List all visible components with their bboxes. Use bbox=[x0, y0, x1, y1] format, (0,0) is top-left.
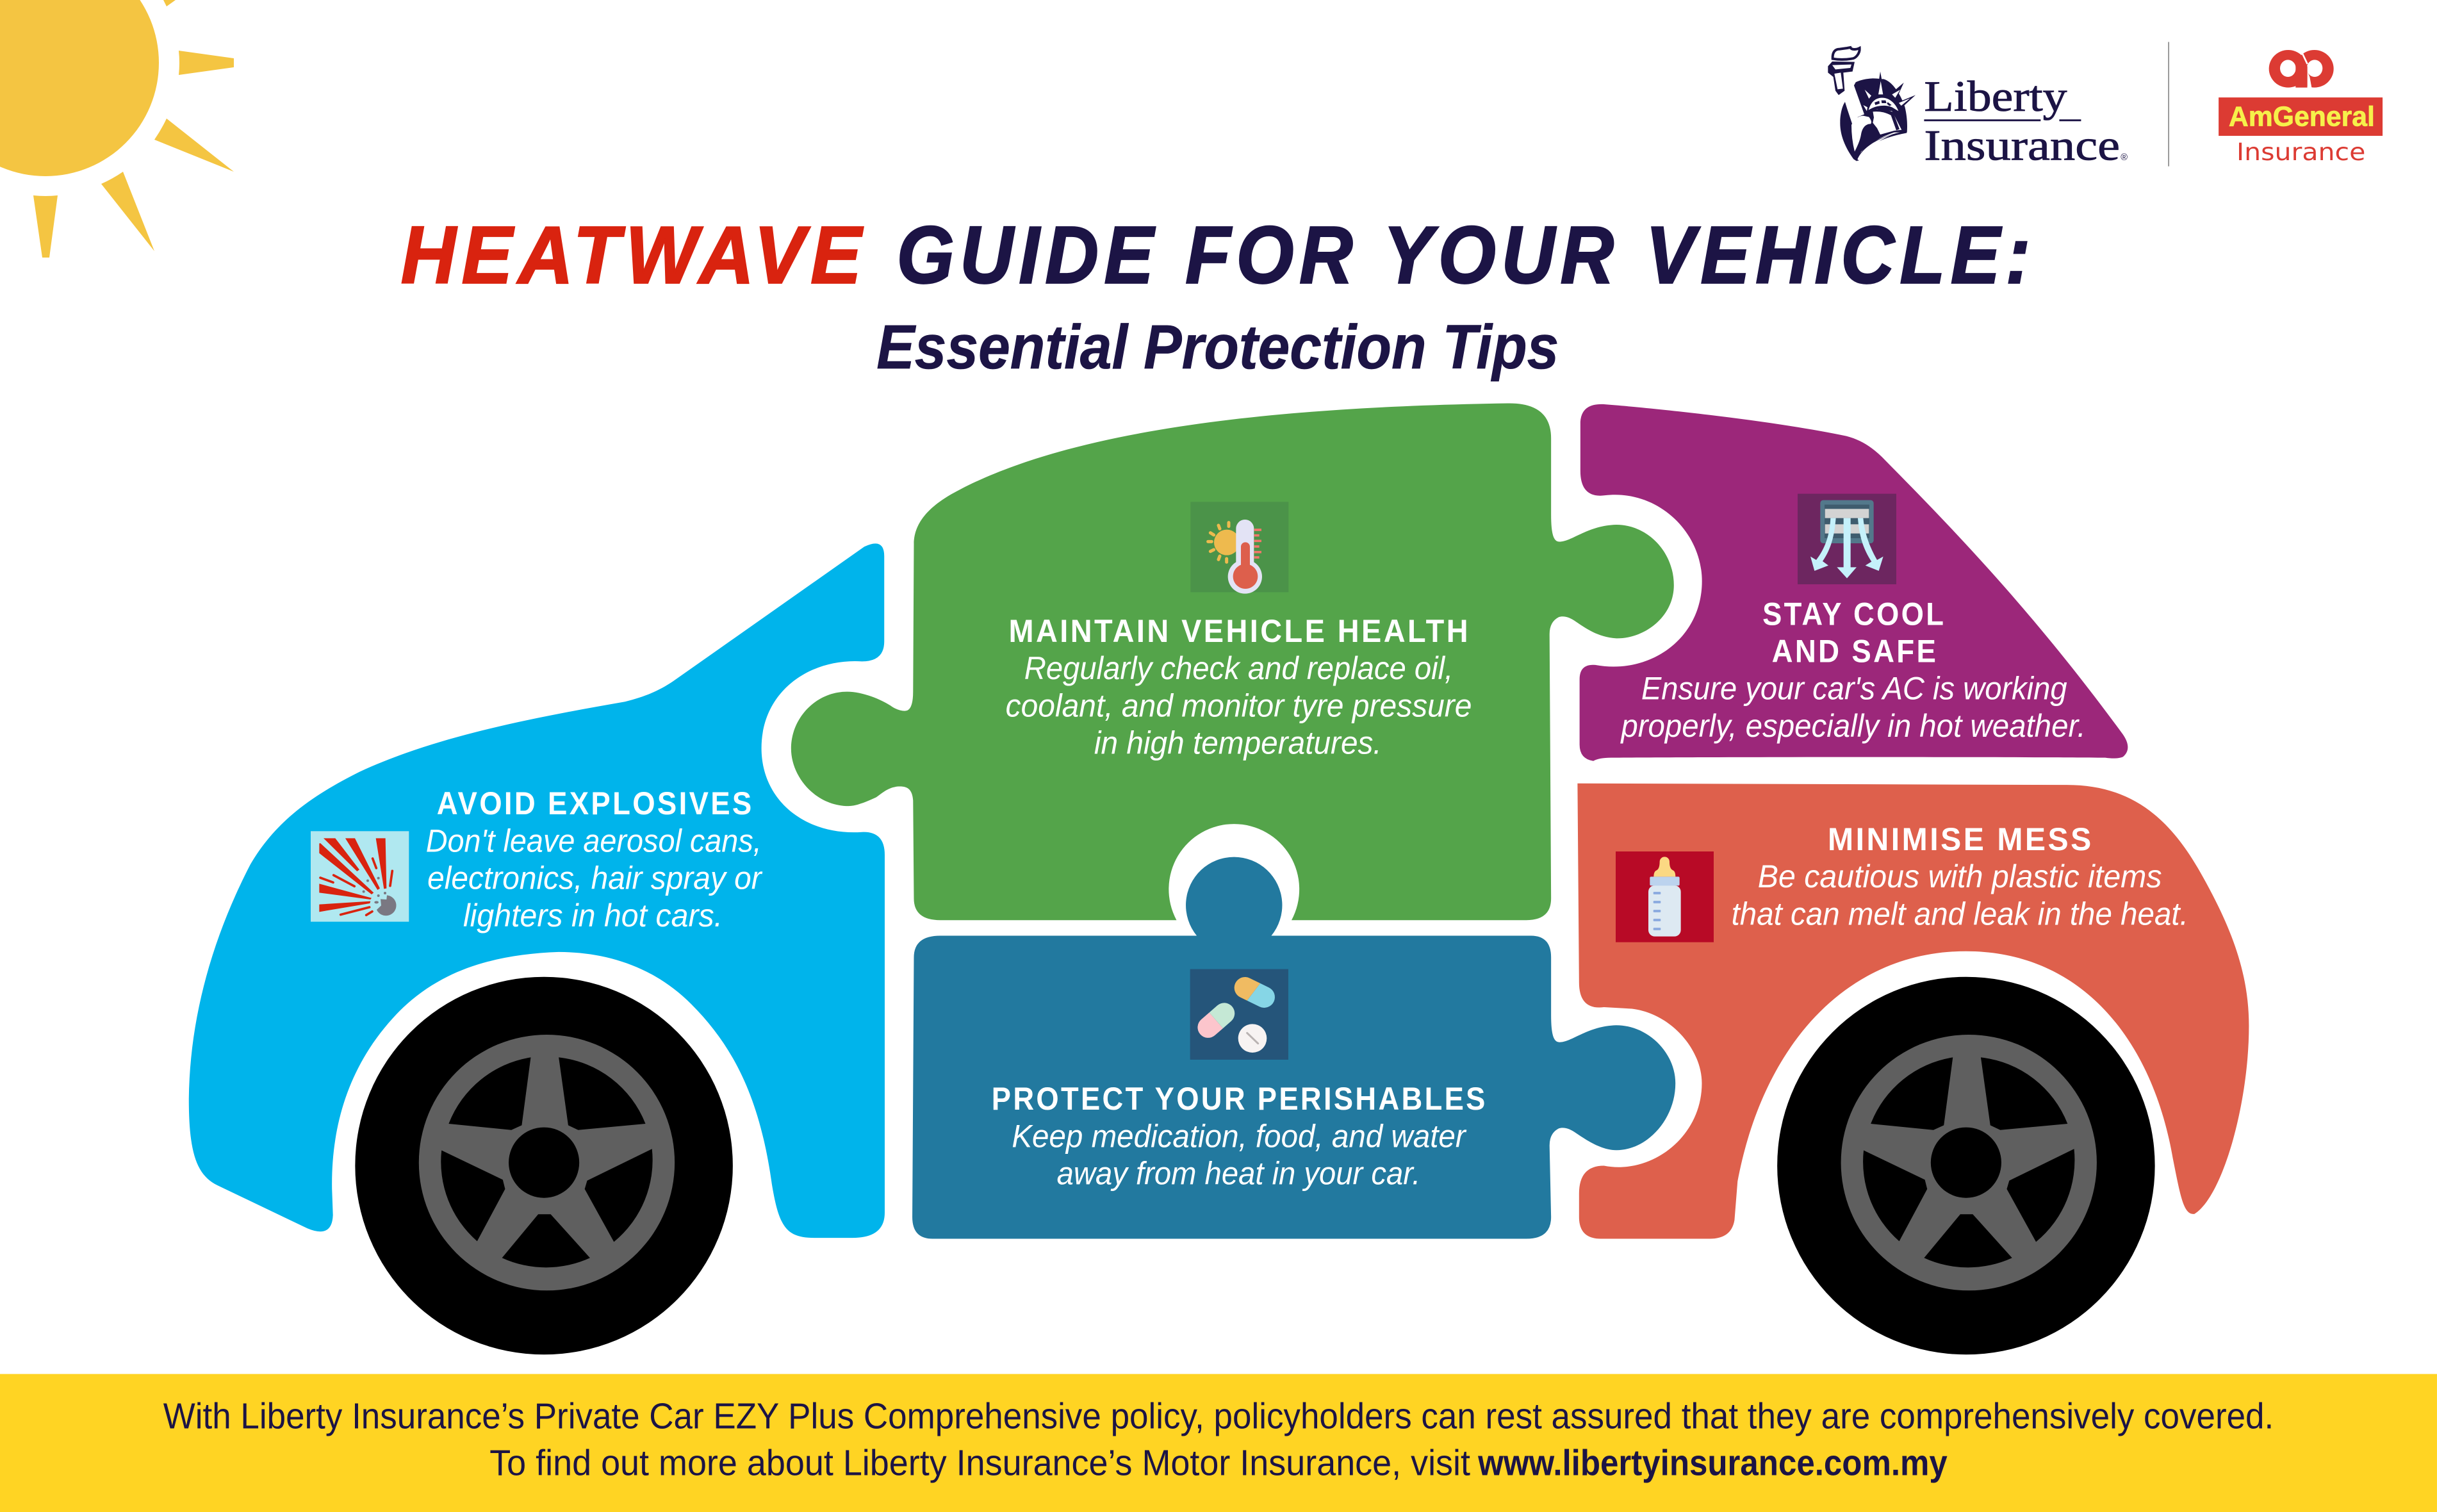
wheel: rear bbox=[1777, 977, 2155, 1354]
divider bbox=[2168, 42, 2169, 167]
text: maintain vehicle health: coolant, and monitor tyre pressure bbox=[1006, 687, 1472, 723]
logo: Liberty Insurance bbox=[1828, 47, 2128, 169]
wheel: front bbox=[355, 977, 733, 1354]
text: minimise mess: Be cautious with plastic items bbox=[1758, 859, 2162, 894]
title bbox=[401, 210, 2036, 300]
text: minimise mess: that can melt and leak in the heat. bbox=[1732, 896, 2188, 932]
title: GUIDE FOR YOUR VEHICLE: bbox=[897, 210, 2036, 300]
icon: pills bbox=[1190, 969, 1288, 1060]
icon: sun bbox=[0, 0, 234, 258]
icon: thermometer and sun bbox=[1190, 502, 1288, 594]
footer line 2: To find out more about Liberty Insurance’s Motor Insurance, visit bbox=[489, 1442, 1470, 1483]
text: maintain vehicle health: Regularly check and replace oil, bbox=[1024, 650, 1453, 686]
text: protect your perishables: away from heat in your car. bbox=[1057, 1156, 1420, 1192]
footer band bbox=[0, 1374, 2437, 1512]
text: avoid explosives: lighters in hot cars. bbox=[463, 898, 723, 933]
heading: avoid explosives: AVOID EXPLOSIVES bbox=[437, 785, 754, 821]
heading: protect your perishables: PROTECT YOUR PERISHABLES bbox=[992, 1081, 1488, 1117]
text: avoid explosives: Don't leave aerosol cans, bbox=[426, 823, 762, 859]
text: stay cool and safe bbox=[1620, 671, 2086, 744]
text: avoid explosives: electronics, hair spray or bbox=[427, 860, 763, 896]
text: avoid explosives bbox=[426, 823, 763, 933]
text: maintain vehicle health: in high temperatures. bbox=[1094, 725, 1382, 761]
icon: air conditioner bbox=[1798, 494, 1896, 584]
text: minimise mess bbox=[1732, 859, 2188, 932]
footer line 1: With Liberty Insurance’s Private Car EZY Plus Comprehensive policy, policyholders can rest assured that they are comprehensively covered. bbox=[163, 1395, 2274, 1436]
logo: AmGeneral Insurance: Insurance bbox=[2236, 138, 2365, 166]
text: protect your perishables: Keep medication, food, and water bbox=[1012, 1118, 1467, 1154]
text: maintain vehicle health bbox=[1006, 650, 1472, 761]
panel: minimise mess bbox=[1577, 784, 2249, 1239]
text: stay cool and safe: Ensure your car's AC is working bbox=[1641, 671, 2067, 707]
heading: maintain vehicle health: MAINTAIN VEHICLE HEALTH bbox=[1008, 613, 1470, 649]
heading: minimise mess: MINIMISE MESS bbox=[1828, 821, 2094, 857]
footer line 2: www.libertyinsurance.com.my bbox=[1477, 1442, 1948, 1483]
logo: Liberty Insurance: Liberty bbox=[1924, 72, 2067, 120]
heading: stay cool and safe: STAY COOL bbox=[1762, 596, 1946, 632]
logo: Liberty Insurance: Insurance bbox=[1924, 120, 2120, 169]
icon: explosion bbox=[311, 831, 409, 922]
panel: maintain vehicle health bbox=[791, 404, 1674, 920]
subtitle: Essential Protection Tips bbox=[876, 312, 1559, 382]
logo: Liberty Insurance: ® bbox=[2121, 152, 2128, 163]
text: stay cool and safe: properly, especially in hot weather. bbox=[1620, 708, 2086, 744]
logo: AmGeneral Insurance: AmGeneral bbox=[2229, 101, 2375, 133]
text: protect your perishables bbox=[1012, 1118, 1467, 1192]
heading: stay cool and safe bbox=[1762, 596, 1946, 669]
logo: AmGeneral Insurance bbox=[2219, 49, 2383, 166]
panel: protect your perishables bbox=[912, 857, 1675, 1239]
heading: stay cool and safe: AND SAFE bbox=[1772, 633, 1938, 669]
title: HEATWAVE bbox=[401, 210, 867, 300]
panel: avoid explosives bbox=[189, 543, 885, 1238]
icon: baby bottle bbox=[1616, 851, 1714, 942]
panel: stay cool and safe bbox=[1580, 404, 2128, 761]
